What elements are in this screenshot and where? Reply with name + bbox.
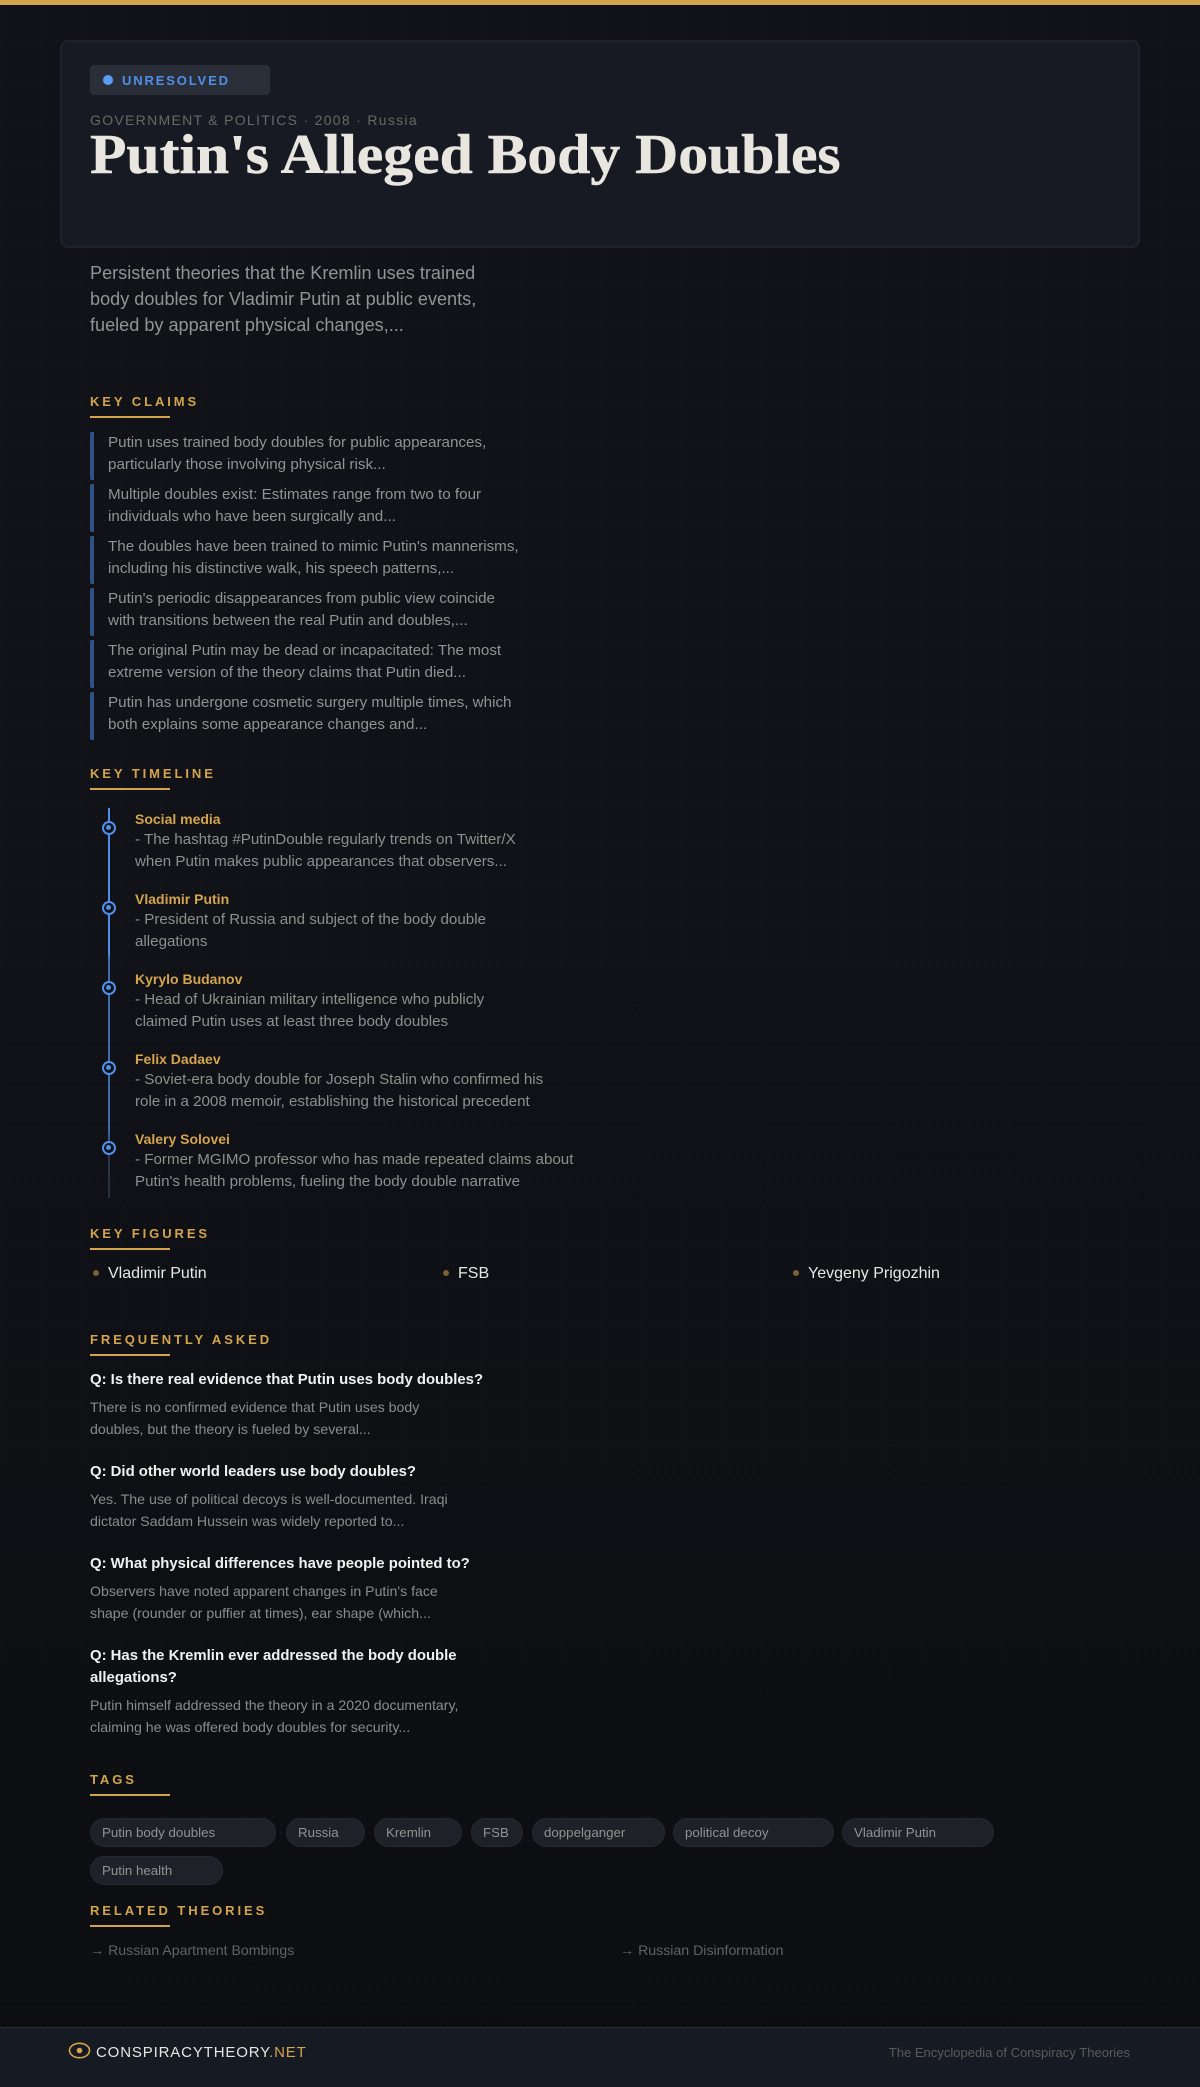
tag list	[90, 1818, 994, 1885]
tag: FSB	[483, 1825, 509, 1840]
top accent bar	[0, 0, 1200, 5]
faq 2: Yes. The use of political decoys is well-documented. Iraqi	[90, 1490, 448, 1506]
tag	[374, 1818, 462, 1847]
faq 4: Q: Has the Kremlin ever addressed the body double	[90, 1648, 457, 1664]
tag: Putin health	[102, 1863, 172, 1878]
faq 1: doubles, but the theory is fueled by several...	[90, 1420, 371, 1436]
timeline entry: Felix Dadaev: - Soviet-era body double for Joseph Stalin who confirmed his	[135, 1071, 543, 1088]
timeline entry: Vladimir Putin	[135, 891, 486, 950]
claim 6	[90, 692, 570, 740]
timeline entry: Kyrylo Budanov: claimed Putin uses at least three body doubles	[135, 1013, 448, 1030]
status label: UNRESOLVED	[122, 72, 230, 88]
timeline entry: Felix Dadaev	[135, 1051, 543, 1110]
summary text: body doubles for Vladimir Putin at public events,	[90, 288, 476, 308]
faq 3: Observers have noted apparent changes in Putin's face	[90, 1582, 438, 1598]
faq 3: shape (rounder or puffier at times), ear shape (which...	[90, 1604, 431, 1620]
claim 1: particularly those involving physical risk...	[108, 456, 386, 472]
timeline entry: social media: Social media	[135, 811, 221, 827]
tag	[286, 1818, 365, 1847]
claim 5	[90, 640, 570, 688]
heading: frequently asked: FREQUENTLY ASKED	[90, 1332, 272, 1346]
timeline	[102, 808, 574, 1198]
icon: eye logo	[68, 2042, 90, 2058]
tag	[90, 1856, 223, 1885]
heading: key timeline: KEY TIMELINE	[90, 766, 216, 780]
tag: doppelganger	[544, 1825, 625, 1840]
summary text: fueled by apparent physical changes,...	[90, 314, 404, 334]
claim 6: both explains some appearance changes and...	[108, 716, 427, 732]
claim 1: Putin uses trained body doubles for public appearances,	[108, 434, 486, 450]
claim 4: with transitions between the real Putin and doubles,...	[108, 612, 468, 628]
tag	[532, 1818, 665, 1847]
figure: FSB: FSB	[458, 1264, 489, 1282]
timeline entry: Vladimir Putin: allegations	[135, 933, 207, 950]
timeline entry: Felix Dadaev: Felix Dadaev	[135, 1051, 221, 1067]
faq 2	[90, 1464, 448, 1529]
heading: related theories: RELATED THEORIES	[90, 1902, 267, 1918]
timeline entry: Kyrylo Budanov	[135, 971, 484, 1030]
heading: tags: TAGS	[90, 1772, 137, 1786]
claim 2	[90, 484, 570, 532]
title: Putin's Alleged Body Doubles	[90, 124, 841, 186]
claim 1	[90, 432, 570, 480]
tag: Vladimir Putin	[854, 1825, 936, 1840]
claim 3: The doubles have been trained to mimic Putin's mannerisms,	[108, 538, 519, 554]
timeline entry: Vladimir Putin: - President of Russia and subject of the body double	[135, 911, 486, 928]
timeline entry: Valery Solovei: Putin's health problems, fueling the body double narrative	[135, 1173, 520, 1190]
timeline marker 1	[102, 821, 116, 835]
status badge: unresolved	[90, 65, 270, 95]
timeline entry: Valery Solovei: - Former MGIMO professor who has made repeated claims about	[135, 1151, 573, 1168]
tag: Russia	[298, 1825, 339, 1840]
claim 4: Putin's periodic disappearances from public view coincide	[108, 590, 495, 606]
claim 4	[90, 588, 570, 636]
tag	[90, 1818, 276, 1847]
faq 1: There is no confirmed evidence that Putin uses body	[90, 1398, 419, 1414]
timeline entry: social media: when Putin makes public appearances that observers...	[135, 853, 507, 870]
tag	[673, 1818, 834, 1847]
related link 1: → Russian Apartment Bombings	[90, 1942, 294, 1958]
figure: Vladimir Putin: Vladimir Putin	[108, 1264, 207, 1282]
claim 3: including his distinctive walk, his speech patterns,...	[108, 560, 454, 576]
status dot	[103, 75, 113, 85]
panel: key claims list	[90, 432, 519, 740]
faq 4	[90, 1648, 458, 1735]
timeline entry: Kyrylo Budanov: - Head of Ukrainian military intelligence who publicly	[135, 991, 484, 1008]
tag: Putin body doubles	[102, 1825, 215, 1840]
category meta line: GOVERNMENT & POLITICS · 2008 · Russia	[90, 112, 418, 128]
panel: header card	[60, 40, 1140, 248]
timeline entry: social media: - The hashtag #PutinDouble regularly trends on Twitter/X	[135, 831, 516, 848]
timeline marker 2	[102, 901, 116, 915]
tag	[842, 1818, 994, 1847]
timeline entry: Kyrylo Budanov: Kyrylo Budanov	[135, 971, 242, 987]
tag: Kremlin	[386, 1825, 431, 1840]
timeline entry: Vladimir Putin: Vladimir Putin	[135, 891, 229, 907]
faq 2: Q: Did other world leaders use body doubles?	[90, 1464, 416, 1480]
timeline marker 3	[102, 981, 116, 995]
faq 4: Putin himself addressed the theory in a 2020 documentary,	[90, 1696, 458, 1712]
summary text: Persistent theories that the Kremlin uses trained	[90, 262, 475, 282]
timeline entry: social media	[135, 811, 516, 870]
faq 1: Q: Is there real evidence that Putin uses body doubles?	[90, 1372, 483, 1388]
footer brand: CONSPIRACYTHEORY.NET	[96, 2044, 307, 2061]
claim 6: Putin has undergone cosmetic surgery multiple times, which	[108, 694, 512, 710]
timeline marker 4	[102, 1061, 116, 1075]
timeline entry: Valery Solovei: Valery Solovei	[135, 1131, 230, 1147]
claim 2: Multiple doubles exist: Estimates range from two to four	[108, 486, 481, 502]
faq 3	[90, 1556, 470, 1621]
faq 1	[90, 1372, 483, 1437]
claim 5: The original Putin may be dead or incapacitated: The most	[108, 642, 501, 658]
heading: key claims: KEY CLAIMS	[90, 394, 199, 408]
summary text	[90, 262, 476, 335]
claim 5: extreme version of the theory claims that Putin died...	[108, 664, 466, 680]
footer bar	[0, 2027, 1200, 2087]
timeline axis	[108, 808, 110, 1198]
timeline marker 5	[102, 1141, 116, 1155]
tag: political decoy	[685, 1825, 769, 1840]
heading: key figures: KEY FIGURES	[90, 1226, 210, 1240]
timeline entry: Valery Solovei	[135, 1131, 574, 1190]
timeline entry: Felix Dadaev: role in a 2008 memoir, establishing the historical precedent	[135, 1093, 530, 1110]
claim 2: individuals who have been surgically and...	[108, 508, 396, 524]
faq 4: claiming he was offered body doubles for security...	[90, 1718, 410, 1734]
claim 3	[90, 536, 570, 584]
related link 2: → Russian Disinformation	[620, 1942, 783, 1958]
figure: Yevgeny Prigozhin: Yevgeny Prigozhin	[808, 1264, 940, 1282]
faq 3: Q: What physical differences have people pointed to?	[90, 1556, 470, 1572]
faq 2: dictator Saddam Hussein was widely reported to...	[90, 1512, 404, 1528]
tag	[471, 1818, 523, 1847]
footer tagline: The Encyclopedia of Conspiracy Theories	[889, 2045, 1130, 2060]
faq 4: allegations?	[90, 1670, 177, 1686]
